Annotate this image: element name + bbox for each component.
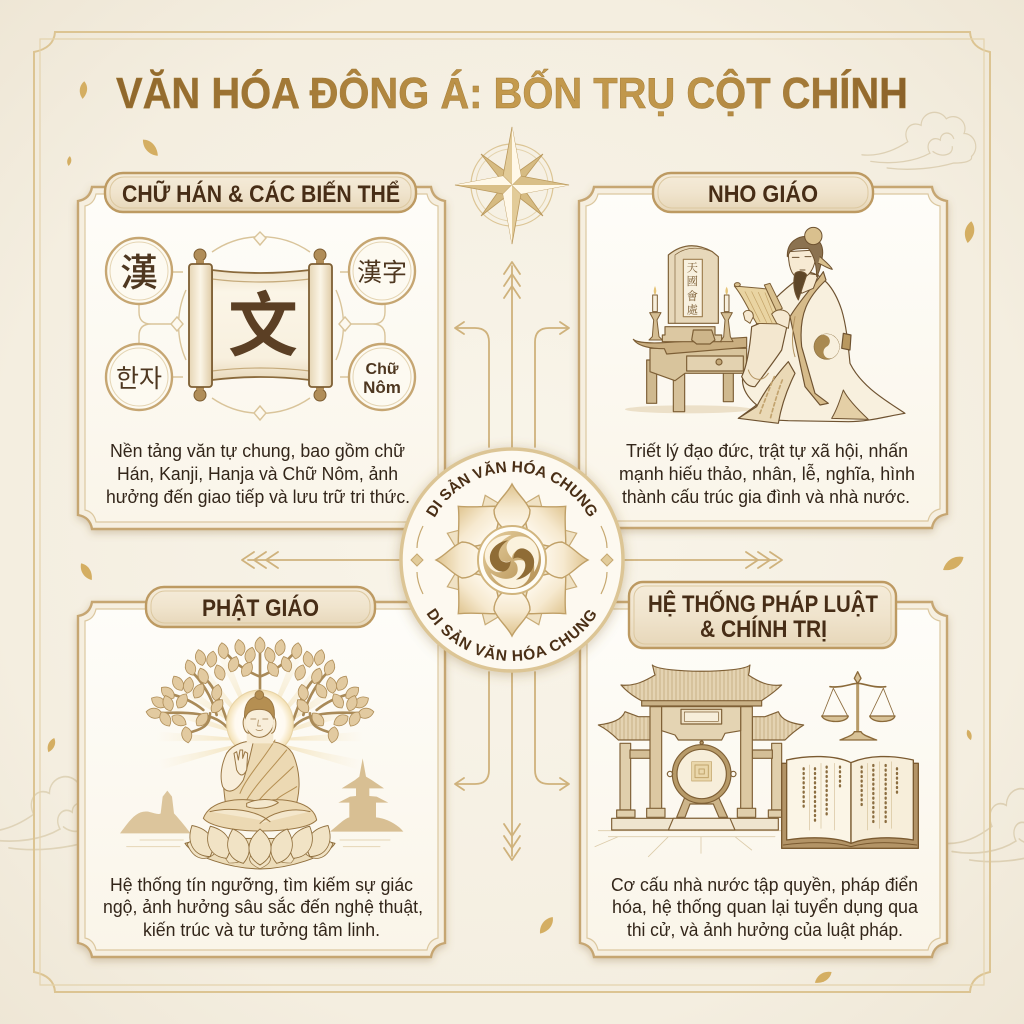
memorial tablet: 天 [687, 260, 698, 276]
medallion: Kanji: 漢字 [357, 253, 407, 289]
diagram connector lines [139, 232, 385, 420]
central medallion: Di sản văn hóa chung [392, 442, 632, 682]
medallion: Han [106, 238, 172, 304]
panel 4 heading tab [629, 582, 896, 648]
panel 3 description: ngộ, ảnh hưởng sâu sắc đến nghệ thuật, [103, 896, 423, 917]
panel 2 frame [579, 187, 947, 528]
medallion: Chu Nom: Nôm [363, 378, 401, 397]
medallion: Hanja [106, 344, 172, 410]
panel 2 description: thành cấu trúc gia đình và nhà nước. [622, 487, 910, 507]
panel 3 heading tab [146, 587, 375, 627]
scholar robe [738, 272, 905, 423]
memorial tablet [662, 246, 722, 344]
arrow: to top right panel [535, 322, 569, 447]
panel 1 heading tab: CHỮ HÁN & CÁC BIẾN THỂ [122, 180, 400, 208]
arrow: to bottom right panel [535, 672, 569, 790]
medallion disc [401, 449, 623, 671]
panel: Nho giáo [579, 173, 947, 528]
medallion: Chu Nom: Chữ [366, 361, 399, 378]
memorial tablet: 國 [687, 273, 698, 289]
character: van: 文 [228, 270, 298, 371]
icon: compass star [455, 127, 569, 244]
panel: Phật giáo [78, 587, 445, 957]
curved label: bottom: DI SẢN VĂN HÓA CHUNG [426, 608, 596, 661]
icon: scroll [189, 249, 332, 401]
panel 1 description [106, 441, 410, 507]
memorial tablet: 處 [687, 301, 698, 317]
candles [649, 286, 733, 342]
panel 4 heading tab: & CHÍNH TRỊ [700, 615, 827, 643]
panel 3 description: Hệ thống tín ngưỡng, tìm kiếm sự giác [110, 875, 413, 895]
panel 4 heading tab: HỆ THỐNG PHÁP LUẬT [648, 590, 878, 618]
arrow: to bottom left panel [455, 672, 489, 790]
medallion: Hanja: 한자 [116, 359, 162, 395]
panel 1 description: Hán, Kanji, Hanja và Chữ Nôm, ảnh [117, 464, 398, 484]
ceremonial drum [667, 741, 736, 817]
panel 3 heading tab: PHẬT GIÁO [202, 594, 319, 622]
side ornaments [411, 526, 613, 594]
panel 3 description [103, 875, 423, 940]
panel 2 description [619, 441, 915, 507]
curved text path bottom [411, 560, 613, 661]
arrow: right [622, 552, 782, 568]
memorial tablet: 會 [687, 288, 698, 304]
panel 1 description: hưởng đến giao tiếp và lưu trữ tri thức. [106, 487, 410, 507]
title: VĂN HÓA ĐÔNG Á: BỐN TRỤ CỘT CHÍNH [116, 67, 908, 118]
illustration: gate, drum, scales and law book [595, 665, 918, 857]
imperial gate [598, 665, 804, 830]
light rays [157, 644, 363, 770]
panel 3 frame [78, 602, 445, 957]
panel 1 description: Nền tảng văn tự chung, bao gồm chữ [110, 441, 405, 461]
arrow: up [504, 262, 520, 450]
panel 1 heading tab [105, 173, 416, 212]
medallion: Kanji [349, 238, 415, 304]
arrow: down [504, 672, 520, 860]
connector arrows [242, 262, 782, 860]
panel 2 heading tab [653, 173, 873, 212]
panel: Hệ thống pháp luật & chính trị [580, 582, 947, 957]
curved label: top: DI SẢN VĂN HÓA CHUNG [426, 460, 596, 518]
yin yang symbol [814, 329, 844, 361]
silhouette: right pagoda and hill [330, 758, 403, 832]
arrow: to top left panel [455, 322, 489, 447]
panel 4 description: thi cử, và ảnh hưởng của luật pháp. [627, 920, 903, 940]
medallion: Chu Nom [349, 344, 415, 410]
illustration: altar and Confucian scholar [625, 227, 905, 423]
panel 3 description: kiến trúc và tư tưởng tâm linh. [143, 920, 380, 940]
Buddha figure [203, 691, 317, 831]
panel 2 description: Triết lý đạo đức, trật tự xã hội, nhấn [626, 441, 908, 461]
panel 4 description [611, 875, 919, 940]
medallion: Han: 漢 [120, 242, 158, 297]
panel 2 heading tab: NHO GIÁO [708, 180, 818, 208]
Bodhi tree [145, 637, 375, 744]
panel 2 description: mạnh hiếu thảo, nhân, lễ, nghĩa, hình [619, 463, 915, 484]
panel: Chữ Hán & các biến thể [78, 173, 445, 529]
lotus emblem [436, 484, 588, 636]
decorative clouds [0, 112, 1024, 862]
altar table [625, 337, 752, 413]
halo [227, 690, 293, 757]
scroll held by scholar [734, 283, 790, 328]
silhouette: left stupa and hills [120, 791, 191, 833]
open law book [782, 757, 918, 848]
scholar head [787, 227, 832, 300]
panel 4 frame [580, 602, 947, 957]
panel 1 frame [78, 187, 445, 529]
lotus throne [183, 820, 337, 869]
arrow: left [242, 552, 402, 568]
illustration: Buddha under Bodhi tree [120, 637, 403, 869]
curved text paths [424, 472, 600, 560]
icon: scales of justice [822, 672, 895, 740]
ground [595, 831, 782, 857]
panel 4 description: hóa, hệ thống quan lại tuyển dụng qua [612, 897, 919, 917]
panel 4 description: Cơ cấu nhà nước tập quyền, pháp điển [611, 875, 918, 895]
